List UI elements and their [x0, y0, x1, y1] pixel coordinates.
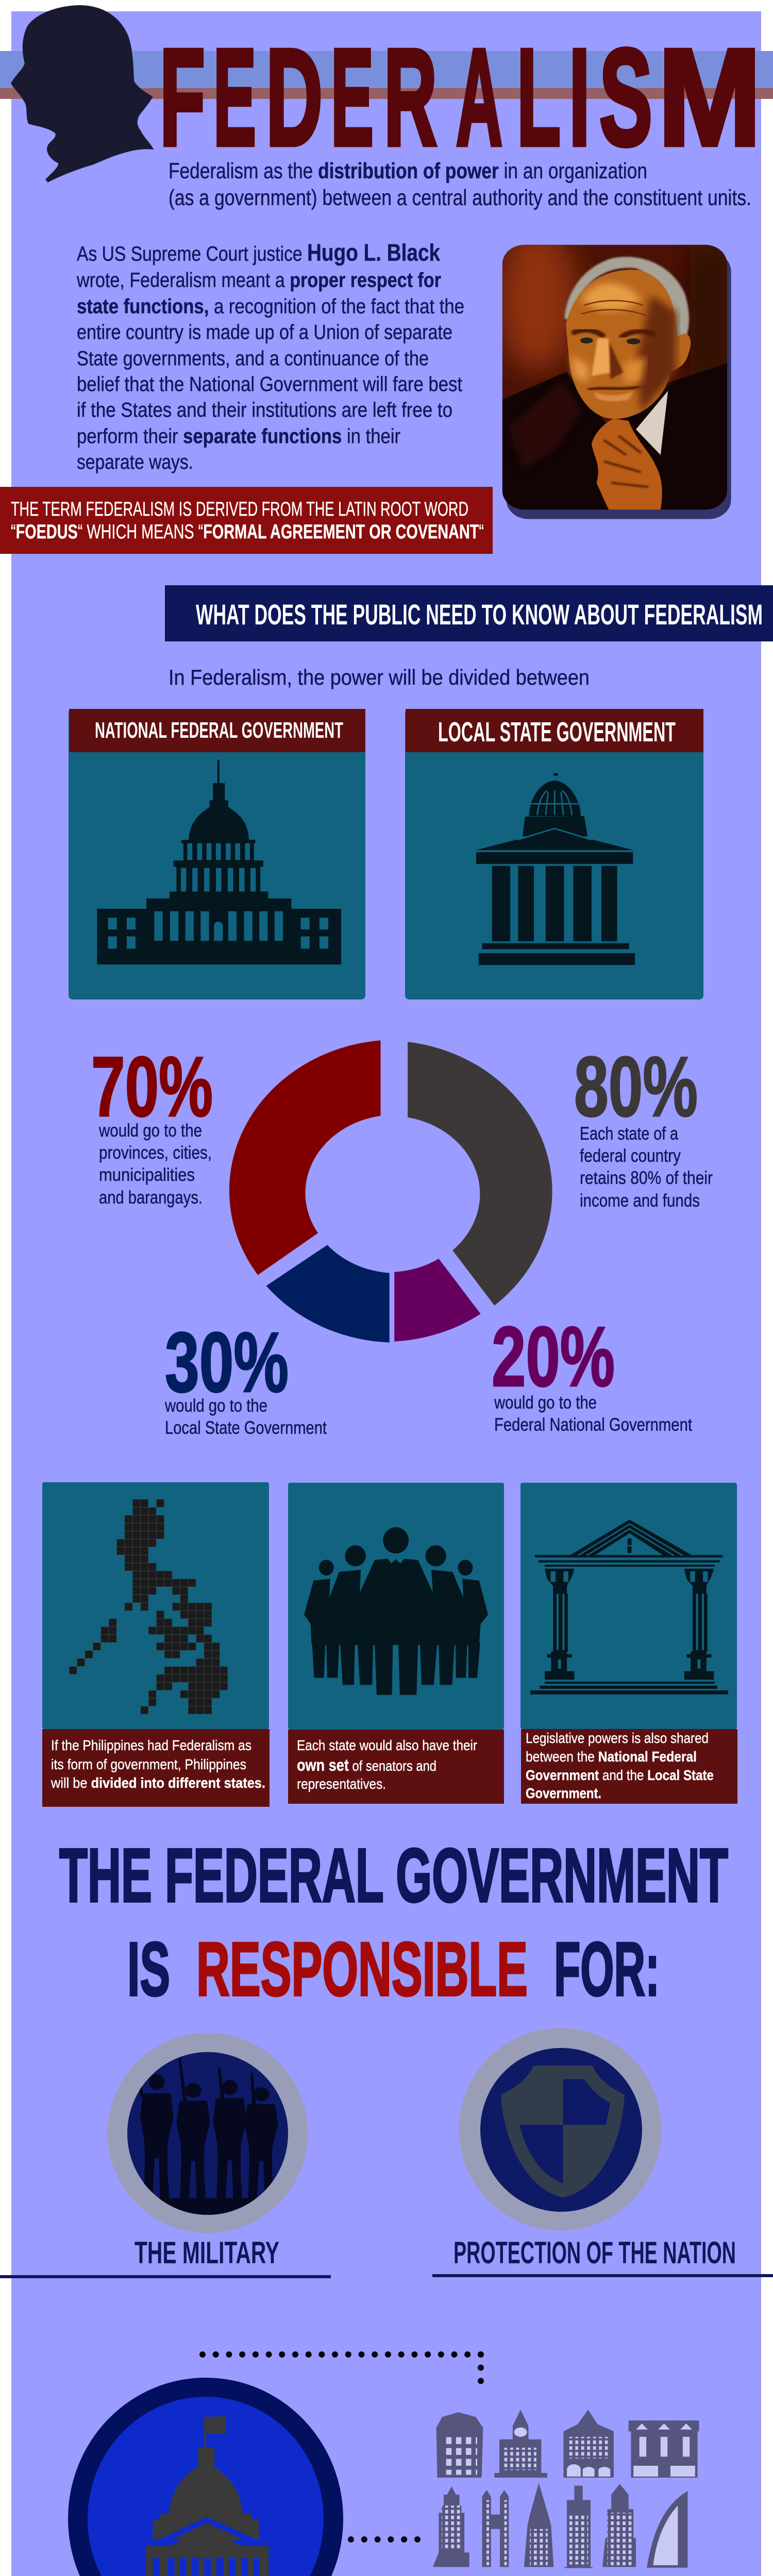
panel: senators and representatives: own set of senators and	[297, 1756, 436, 1774]
icon: temple portico	[530, 1519, 728, 1694]
title: D	[266, 20, 323, 174]
text block: Hugo L. Black paragraph: State governments, and a continuance of the	[77, 347, 429, 370]
heading: the federal government is responsible for: FOR:	[554, 1927, 660, 2012]
panel: Philippines states: If the Philippines had Federalism as	[51, 1737, 251, 1753]
stat: 70%: provinces, cities,	[99, 1143, 212, 1163]
stat: 80%: federal country	[580, 1146, 681, 1166]
stat: 80%: Each state of a	[580, 1124, 678, 1144]
stat: 20%	[492, 1309, 692, 1435]
icon: group of people	[304, 1527, 488, 1695]
segment: 70% red	[229, 1040, 380, 1275]
text block: Hugo L. Black paragraph: entire country is made up of a Union of separate	[77, 321, 452, 344]
callout: Latin root word: “FOEDUS“ WHICH MEANS “FORMAL AGREEMENT OR COVENANT“	[11, 521, 484, 543]
icon: local state capitol	[68, 2378, 343, 2576]
stat: 80%: income and funds	[580, 1191, 700, 1211]
stat: 70%	[91, 1039, 213, 1208]
panel: legislative powers: Government and the Local State	[526, 1767, 714, 1783]
title: L	[517, 20, 561, 174]
stat: 20%: Federal National Government	[494, 1415, 692, 1435]
stat: 20%: would go to the	[494, 1393, 597, 1413]
text block: Hugo L. Black paragraph: separate ways.	[77, 451, 193, 473]
title: E	[331, 20, 374, 174]
title: A	[456, 20, 502, 174]
panel: legislative powers: between the National Federal	[526, 1749, 697, 1765]
title: M	[658, 20, 761, 174]
stat: 30%: Local State Government	[165, 1418, 327, 1438]
icons: city buildings	[423, 2410, 711, 2576]
icon: shield	[459, 2028, 662, 2231]
panel: senators and representatives: representatives.	[297, 1776, 386, 1792]
icon: capitol	[97, 760, 341, 964]
text block: Hugo L. Black paragraph: As US Supreme Court justice Hugo L. Black	[77, 239, 440, 266]
heading: what does the public need to know	[165, 585, 773, 641]
panel: national federal government	[69, 709, 365, 999]
stat: 80%	[574, 1039, 713, 1211]
title: E	[213, 20, 256, 174]
intro text	[169, 159, 751, 210]
stat: 30%: 30%	[165, 1315, 289, 1410]
text block: Hugo L. Black paragraph: perform their separate functions in their	[77, 425, 400, 448]
text: power divided: In Federalism, the power will be divided between	[169, 665, 590, 689]
text block: Hugo L. Black paragraph	[76, 239, 464, 473]
portrait: Hugo L. Black	[498, 226, 731, 519]
text block: Hugo L. Black paragraph: belief that the National Government will fare best	[77, 373, 462, 396]
panel: national federal government: NATIONAL FEDERAL GOVERNMENT	[95, 718, 343, 743]
segment: 20% purple	[394, 1259, 481, 1342]
panel: Philippines states: will be divided into different states.	[51, 1775, 265, 1791]
callout: Latin root word: THE TERM FEDERALISM IS DERIVED FROM THE LATIN ROOT WORD	[11, 498, 468, 520]
text block: Hugo L. Black paragraph: state functions, a recognition of the fact that the	[77, 295, 464, 318]
panel: legislative powers	[520, 1483, 737, 1804]
panel: Philippines states: its form of government, Philippines	[51, 1756, 246, 1772]
callout: Latin root word	[0, 487, 493, 554]
connector: dotted line to buildings	[203, 2354, 483, 2576]
stat: 70%: would go to the	[98, 1121, 202, 1141]
icon: pixel map of the Philippines	[69, 1499, 228, 1714]
title: I	[569, 20, 590, 174]
title: S	[599, 20, 652, 174]
intro text: Federalism as the distribution of power in an organization	[169, 159, 647, 183]
text block: Hugo L. Black paragraph: if the States and their institutions are left free to	[77, 399, 452, 421]
panel: legislative powers: Government.	[526, 1785, 601, 1801]
panel: senators and representatives	[288, 1483, 504, 1804]
heading: the federal government is responsible for: IS	[127, 1927, 170, 2012]
chart: donut of power share	[229, 1040, 552, 1343]
icon: founder silhouette	[11, 5, 154, 182]
title: F	[160, 20, 205, 174]
icon: the military	[107, 2033, 308, 2233]
soldiers	[123, 2059, 291, 2218]
label: the military: THE MILITARY	[135, 2235, 279, 2270]
stat: 30%: would go to the	[164, 1396, 267, 1416]
stat: 70%: municipalities	[99, 1165, 195, 1185]
stat: 80%: 80%	[574, 1039, 698, 1134]
heading: the federal government is responsible for	[59, 1833, 728, 2012]
stat: 70%: 70%	[91, 1039, 213, 1134]
heading: the federal government is responsible for: RESPONSIBLE	[196, 1927, 528, 2012]
header band: blue stripe	[0, 51, 773, 88]
text block: Hugo L. Black paragraph: wrote, Federalism meant a proper respect for	[76, 269, 441, 292]
header band: rose stripe	[0, 88, 773, 99]
icon: state house	[476, 773, 635, 965]
stat: 70%: and barangays.	[99, 1188, 203, 1208]
stat: 80%: retains 80% of their	[580, 1168, 713, 1188]
segment: 30% navy	[266, 1245, 390, 1343]
panel: senators and representatives: Each state would also have their	[297, 1737, 477, 1753]
title: R	[384, 20, 437, 174]
stat: 20%: 20%	[492, 1309, 615, 1404]
panel: local state government	[405, 709, 703, 999]
segment: 80% gray	[408, 1042, 552, 1306]
panel: legislative powers: Legislative powers is also shared	[526, 1730, 709, 1746]
panel: Philippines states	[42, 1482, 270, 1807]
